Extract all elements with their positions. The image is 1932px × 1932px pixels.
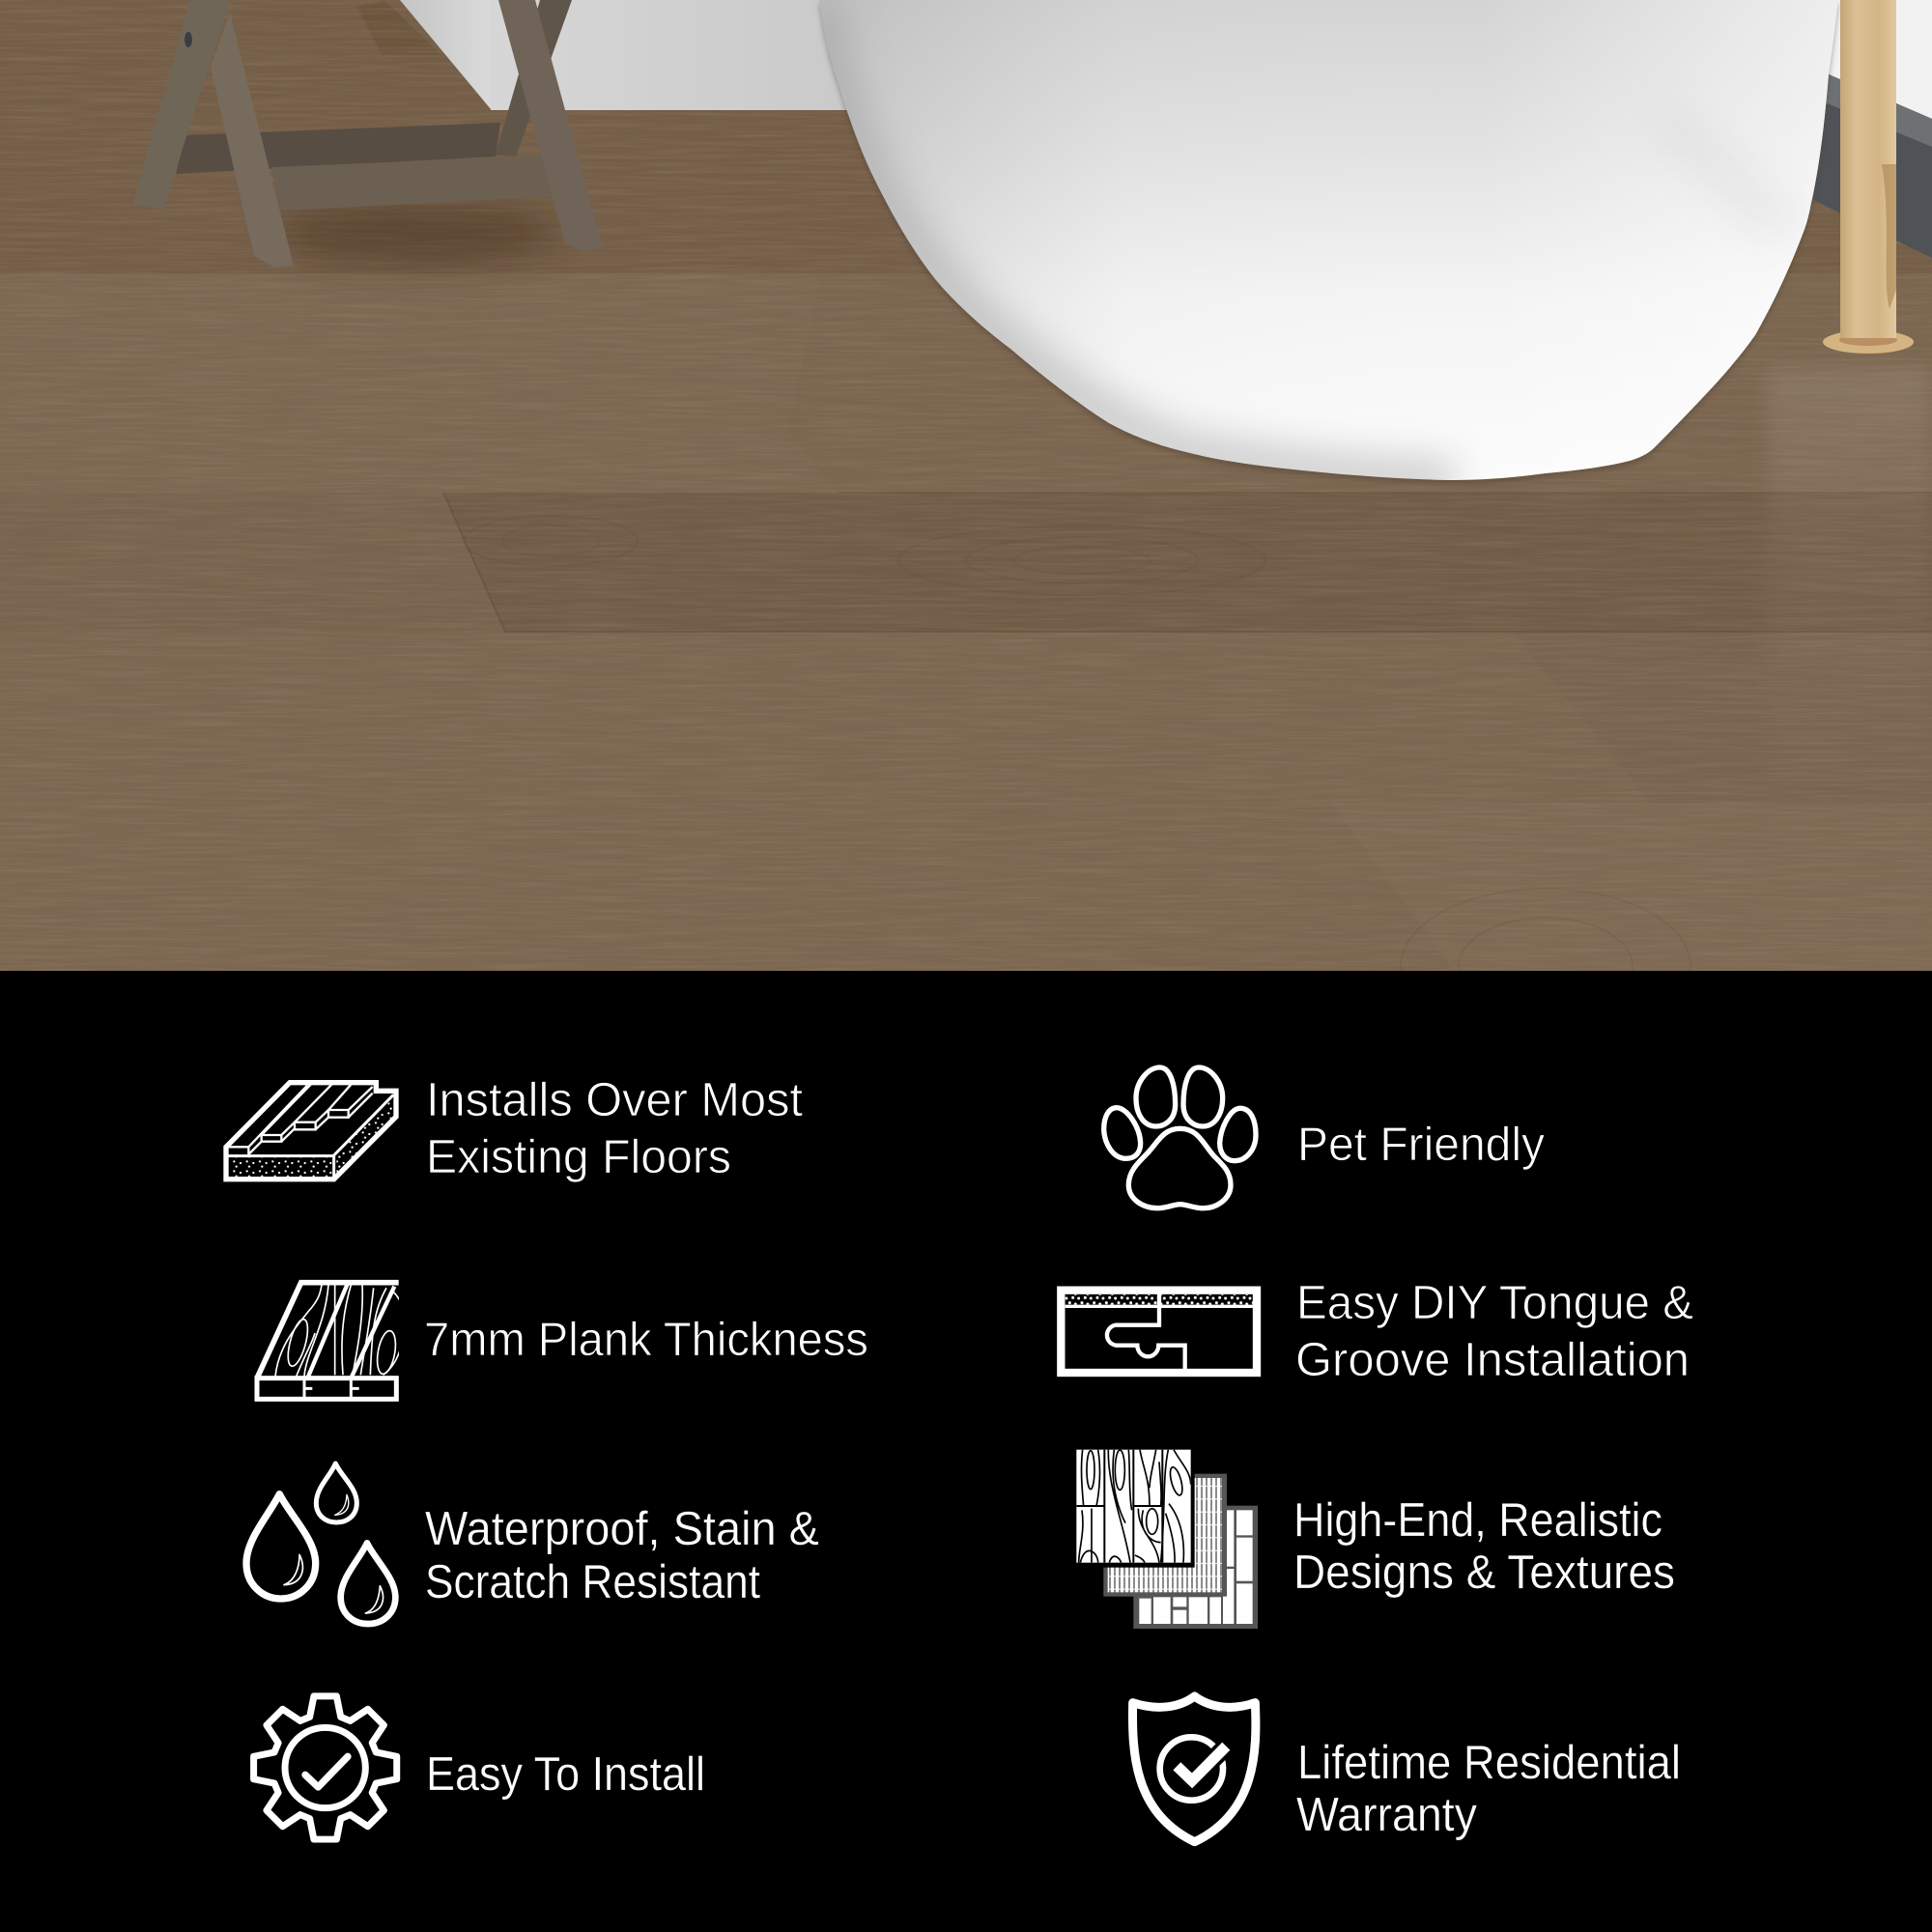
icon: tongue and groove joint: [1061, 1287, 1257, 1376]
icon: wood plank section: [257, 1283, 403, 1399]
wooden stool: [133, 0, 603, 268]
gold faucet: [1823, 0, 1914, 354]
feature: waterproof: [246, 1463, 819, 1624]
icon: stacked texture swatches: [1072, 1446, 1258, 1629]
text: installs over most existing floors: Existing Floors: [426, 1130, 731, 1183]
feature: tongue and groove: [1061, 1276, 1693, 1386]
icon: layered floor planks: [226, 1083, 396, 1179]
wall: [400, 0, 1932, 119]
panel: features list: [226, 1067, 1693, 1842]
feature: easy to install: [254, 1696, 705, 1839]
freestanding bathtub: [819, 0, 1838, 484]
text: installs over most existing floors: Installs Over Most: [426, 1073, 803, 1126]
feature: lifetime warranty: [1133, 1696, 1681, 1842]
text: easy diy tongue and groove installation: [1295, 1276, 1693, 1386]
icon: water drops: [246, 1463, 395, 1624]
text: high-end realistic designs and textures: [1293, 1493, 1675, 1599]
text: easy diy tongue and groove installation: Easy DIY Tongue &: [1296, 1276, 1693, 1329]
text: easy to install: Easy To Install: [426, 1747, 705, 1801]
text: easy diy tongue and groove installation: Groove Installation: [1295, 1333, 1690, 1386]
dark baseboard: [1813, 74, 1932, 258]
text: 7mm plank thickness: 7mm Plank Thickness: [424, 1313, 868, 1366]
feature: realistic designs: [1072, 1446, 1675, 1629]
icon: shield with check: [1133, 1696, 1256, 1842]
text: waterproof, stain and scratch resistant: [425, 1502, 819, 1608]
text: waterproof, stain and scratch resistant: Waterproof, Stain &: [425, 1502, 819, 1555]
feature: installs over most existing floors: [226, 1073, 803, 1183]
text: lifetime residential warranty: Warranty: [1296, 1788, 1477, 1841]
text: high-end realistic designs and textures: Designs & Textures: [1293, 1546, 1675, 1599]
text: lifetime residential warranty: Lifetime Residential: [1297, 1736, 1681, 1789]
text: installs over most existing floors: [426, 1073, 803, 1183]
panel: bathroom photo: [0, 0, 1932, 1043]
shadow under stool: [270, 205, 560, 263]
wood floor: [0, 0, 1932, 1043]
text: pet friendly: Pet Friendly: [1297, 1118, 1545, 1171]
text: high-end realistic designs and textures: High-End, Realistic: [1293, 1493, 1662, 1547]
text: waterproof, stain and scratch resistant: Scratch Resistant: [425, 1555, 760, 1608]
text: lifetime residential warranty: [1296, 1736, 1681, 1841]
icon: gear with check: [254, 1696, 397, 1839]
feature: plank thickness: [257, 1283, 868, 1399]
feature: pet friendly: [1104, 1067, 1545, 1208]
icon: paw print: [1104, 1067, 1256, 1208]
